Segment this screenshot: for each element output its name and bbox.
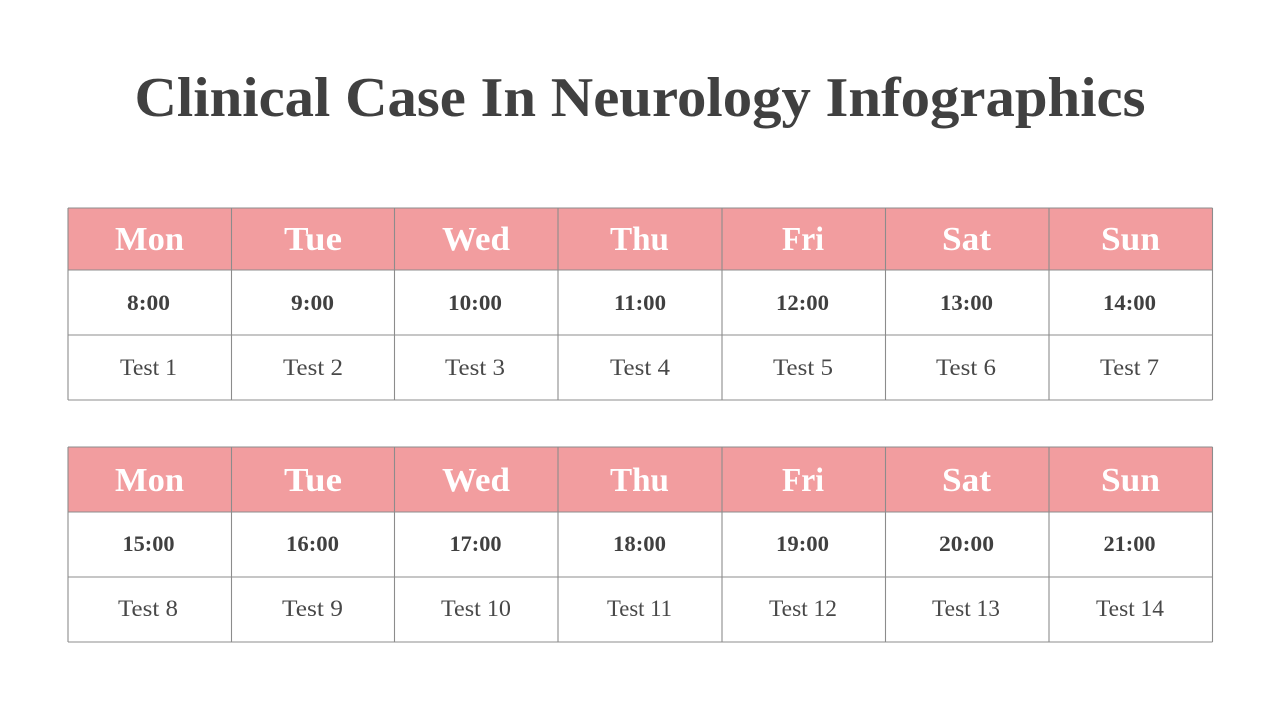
time row: 21:00 xyxy=(1104,531,1156,556)
header row xyxy=(68,208,1212,270)
header row: Tue xyxy=(284,462,342,499)
time row xyxy=(127,290,1156,315)
test row: Test 3 xyxy=(445,355,505,380)
test row xyxy=(118,596,1165,621)
header row: Thu xyxy=(610,462,669,499)
header row xyxy=(68,447,1212,512)
header row: Sat xyxy=(942,462,992,499)
test row: Test 1 xyxy=(120,355,177,380)
time row: 17:00 xyxy=(450,531,502,556)
test row: Test 12 xyxy=(769,596,837,621)
test row: Test 9 xyxy=(282,596,343,621)
time row: 9:00 xyxy=(291,290,334,315)
test row: Test 2 xyxy=(283,355,343,380)
test row: Test 6 xyxy=(936,355,996,380)
header row: Fri xyxy=(782,221,824,258)
header row: Fri xyxy=(782,462,824,499)
header row: Sun xyxy=(1101,221,1160,258)
header row: Wed xyxy=(442,221,510,258)
time row xyxy=(122,531,1156,556)
header row: Wed xyxy=(442,462,510,499)
panel: schedule table 2 xyxy=(68,447,1212,642)
time row: 18:00 xyxy=(613,531,666,556)
time row: 11:00 xyxy=(614,290,666,315)
header row: Mon xyxy=(115,221,184,258)
test row: Test 10 xyxy=(441,596,511,621)
test row: Test 14 xyxy=(1096,596,1165,621)
panel: schedule table 1 xyxy=(68,208,1212,400)
test row: Test 5 xyxy=(773,355,833,380)
time row: 13:00 xyxy=(940,290,993,315)
header row: Sat xyxy=(942,221,992,258)
test row: Test 8 xyxy=(118,596,178,621)
time row: 19:00 xyxy=(776,531,829,556)
time row: 16:00 xyxy=(286,531,339,556)
test row: Test 7 xyxy=(1100,355,1159,380)
test row: Test 13 xyxy=(932,596,1000,621)
test row: Test 11 xyxy=(607,596,672,621)
header row: Mon xyxy=(115,462,184,499)
time row: 20:00 xyxy=(939,531,994,556)
title: Clinical Case In Neurology Infographics xyxy=(134,67,1146,129)
header row: Sun xyxy=(1101,462,1160,499)
time row: 15:00 xyxy=(122,531,174,556)
header row: Thu xyxy=(610,221,669,258)
time row: 14:00 xyxy=(1103,290,1156,315)
time row: 8:00 xyxy=(127,290,170,315)
header row: Tue xyxy=(284,221,342,258)
time row: 12:00 xyxy=(776,290,829,315)
test row: Test 4 xyxy=(610,355,671,380)
time row: 10:00 xyxy=(448,290,502,315)
test row xyxy=(120,355,1159,380)
